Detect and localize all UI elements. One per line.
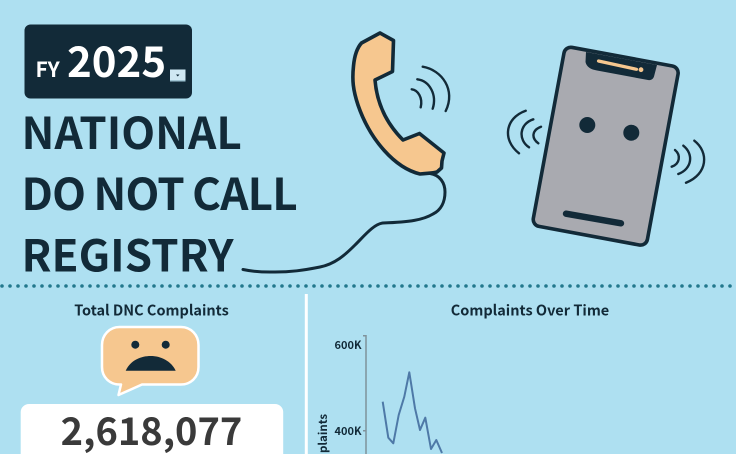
signal waves — [412, 67, 449, 111]
title: NATIONAL — [22, 98, 242, 162]
y axis tick labels — [334, 337, 362, 439]
title: REGISTRY — [22, 220, 234, 284]
year selector badge — [24, 24, 192, 98]
phone notch — [586, 52, 657, 80]
title — [22, 98, 297, 284]
phone mouth — [566, 214, 621, 223]
line chart — [315, 336, 442, 454]
vertical panel divider — [305, 294, 308, 454]
icon: smartphone with face — [508, 46, 704, 246]
y axis tick labels: 600K — [334, 337, 362, 353]
year selector badge: FY — [36, 54, 61, 84]
y axis title: plaints — [315, 414, 331, 453]
left vibration waves — [508, 111, 541, 153]
title: DO NOT CALL — [22, 159, 297, 223]
phone speaker — [598, 61, 643, 72]
right vibration waves — [672, 141, 704, 183]
y axis tick labels: 400K — [334, 423, 362, 439]
icon: telephone handset with cord — [243, 33, 449, 272]
metric card: total complaints value — [21, 401, 283, 454]
y axis — [363, 336, 366, 454]
panel: complaints over time — [315, 300, 609, 454]
complaints line — [383, 372, 442, 453]
heading: complaints over time: Complaints Over Time — [451, 300, 609, 320]
heading: total DNC complaints: Total DNC Complaints — [74, 300, 229, 320]
panel: total complaints — [21, 300, 283, 454]
icon: sad speech bubble — [102, 327, 198, 395]
dotted section divider — [2, 284, 736, 288]
dropdown control — [170, 70, 186, 82]
phone eyes — [579, 117, 639, 141]
year selector badge: 2025 — [67, 29, 166, 90]
